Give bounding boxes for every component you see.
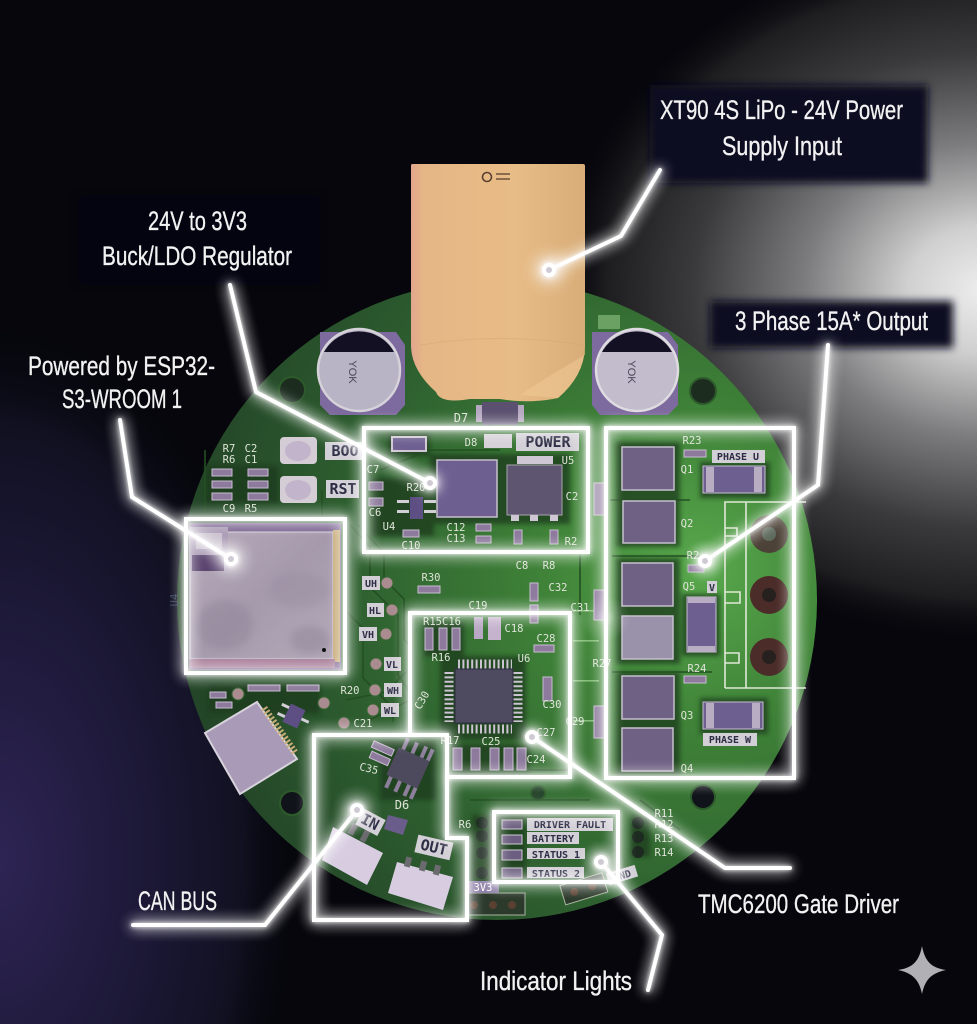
TMC6200 gate driver chip [412, 616, 584, 770]
TMC6200 gate driver chip: R15C16 [423, 616, 461, 628]
CAN bus parts [322, 736, 454, 910]
phase MOSFETs and shunts: Q5 [683, 581, 695, 593]
TMC6200 gate driver chip: R17 [441, 735, 459, 747]
TMC6200 gate driver chip: C28 [537, 633, 555, 645]
diode D7: D7 [454, 411, 468, 425]
mid-board test pads and parts: C31 [571, 602, 589, 614]
tactile buttons: RST [329, 480, 357, 498]
left bulk capacitor: YOK [346, 360, 358, 384]
phase MOSFETs and shunts: Q1 [681, 464, 693, 476]
mid-board test pads and parts: HL [369, 606, 381, 617]
small passives left: R6 [223, 454, 235, 466]
tactile buttons: BOO [331, 442, 359, 460]
mid-board test pads and parts [210, 483, 606, 738]
phase MOSFETs and shunts: Q2 [681, 518, 693, 530]
mid-board test pads and parts: R30 [422, 572, 440, 584]
right bulk capacitor [592, 329, 678, 415]
label: CAN bus: CAN BUS [138, 886, 217, 916]
ground pour via field [573, 315, 620, 722]
CAN bus parts: OUT [419, 836, 449, 859]
header pins: 3V3 [474, 882, 492, 894]
small passives left: R7 [223, 443, 235, 455]
box: power regulator [364, 428, 588, 552]
phase MOSFETs and shunts: V [709, 583, 715, 594]
phase MOSFETs and shunts: Q3 [681, 710, 693, 722]
status LEDs and labels: DRIVER FAULT [534, 820, 606, 831]
label: buck regulator: Buck/LDO Regulator [102, 241, 292, 271]
label: gate driver: TMC6200 Gate Driver [698, 889, 899, 919]
mid-board test pads and parts: C21 [354, 718, 372, 730]
power regulator components: U5 [562, 455, 574, 467]
small passives left: C9 [223, 503, 235, 515]
mid-board test pads and parts: WH [387, 686, 399, 697]
power regulator components [367, 433, 579, 552]
label: XT90 power input: Supply Input [722, 131, 842, 161]
label: XT90 power input: XT90 4S LiPo - 24V Power [660, 95, 903, 125]
circular PCB board [169, 280, 817, 920]
small passives left: C2 [245, 443, 257, 455]
phase MOSFETs and shunts: Q4 [681, 763, 693, 775]
phase MOSFETs and shunts: R2 [687, 550, 699, 562]
label: buck regulator: 24V to 3V3 [148, 206, 247, 236]
leader: buck regulator [230, 285, 430, 483]
label: ESP32 module [28, 351, 215, 414]
box: indicator lights [494, 812, 618, 882]
status LEDs and labels: R11 [655, 808, 673, 820]
mid-board test pads and parts: C8 [516, 560, 528, 572]
highlight glow inside panels [205, 242, 727, 884]
TMC6200 gate driver chip: C29 [566, 716, 584, 728]
copper traces [205, 422, 712, 880]
power regulator components: C12 [447, 522, 465, 534]
TMC6200 gate driver chip: C27 [537, 727, 555, 739]
silkscreen U4: U4 [169, 594, 181, 606]
tactile buttons [280, 437, 363, 503]
status LEDs and labels [459, 808, 673, 880]
power regulator components: R2 [565, 536, 577, 548]
power regulator components: C7 [367, 464, 379, 476]
label: buck regulator [102, 206, 292, 271]
TMC6200 gate driver chip: C30 [412, 689, 432, 712]
CAN bus parts: D6 [395, 798, 409, 812]
label: ESP32 module: Powered by ESP32- [28, 351, 215, 381]
icon: sparkle watermark [898, 946, 946, 994]
leader: CAN bus [133, 810, 357, 925]
TMC6200 gate driver chip: U6 [518, 653, 530, 665]
leader: gate driver [532, 737, 790, 868]
ESP32-S3 module [189, 523, 341, 670]
power regulator components: C13 [447, 533, 465, 545]
small passives left: C1 [245, 454, 257, 466]
mid-board test pads and parts: UH [365, 579, 377, 590]
CAN bus parts: C35 [358, 761, 379, 777]
small passives left: R5 [245, 503, 257, 515]
phase MOSFETs and shunts: PHASE U [717, 452, 759, 463]
mid-board test pads and parts: VH [362, 630, 374, 641]
power regulator components: R20 [407, 482, 425, 494]
status LEDs and labels: R6 [459, 819, 471, 831]
status LEDs and labels: R13 [655, 833, 673, 845]
power regulator components: D8 [465, 437, 477, 449]
component shadows [205, 432, 770, 881]
leader: three phase output [705, 345, 828, 561]
leader: XT90 input [549, 170, 660, 270]
status LEDs and labels: R14 [655, 847, 673, 859]
TMC6200 gate driver chip: C25 [482, 736, 500, 748]
box: three phase output [606, 428, 794, 778]
power regulator components: U4 [383, 521, 395, 533]
TMC6200 gate driver chip: C24 [527, 754, 545, 766]
connector logo [482, 172, 510, 182]
phase MOSFETs and shunts: PHASE W [709, 735, 752, 746]
power regulator components: C10 [402, 540, 420, 552]
phase MOSFETs and shunts: R27 [593, 658, 611, 670]
phase MOSFETs and shunts [593, 435, 765, 775]
leader lines [120, 170, 828, 990]
box: ESP32 module [186, 519, 345, 673]
status LEDs and labels: BATTERY [532, 834, 574, 845]
mid-board test pads and parts: C32 [549, 582, 567, 594]
label: ESP32 module: S3-WROOM 1 [62, 384, 182, 414]
phase MOSFETs and shunts: R23 [683, 435, 701, 447]
mid-board test pads and parts: R8 [543, 560, 555, 572]
mid-board test pads and parts: VL [386, 660, 398, 671]
mid-board test pads and parts: C19 [469, 600, 487, 612]
leader: indicator lights [601, 862, 662, 990]
CAN bus parts: IN [358, 810, 382, 834]
power regulator components: C6 [369, 507, 381, 519]
XT90 power connector [411, 164, 585, 401]
TMC6200 gate driver chip: C30 [543, 699, 561, 711]
right bulk capacitor: YOK [625, 360, 637, 384]
label: indicator lights: Indicator Lights [480, 966, 632, 996]
leader end dots [226, 265, 710, 867]
power regulator components: POWER [525, 433, 572, 451]
mounting holes [279, 377, 716, 815]
header pins: GND [612, 869, 633, 884]
TMC6200 gate driver chip: C18 [505, 623, 523, 635]
leader: ESP32 [120, 420, 231, 559]
highlight outline boxes [186, 428, 794, 920]
phase MOSFETs and shunts: R24 [688, 663, 706, 675]
mid-board test pads and parts: WL [384, 706, 396, 717]
mid-board test pads and parts: R20 [341, 685, 359, 697]
left bulk capacitor [318, 329, 405, 415]
label backing panels [78, 85, 953, 348]
3-phase screw terminal [725, 502, 806, 688]
header pins [467, 865, 638, 915]
box: gate driver and CAN bus [314, 613, 570, 920]
status LEDs and labels: STATUS 2 [532, 869, 580, 880]
small passives left [212, 443, 268, 515]
diode D7 [454, 402, 524, 425]
status LEDs and labels: STATUS 1 [532, 850, 580, 861]
power regulator components: C2 [566, 491, 578, 503]
USB-C connector [205, 702, 297, 794]
TMC6200 gate driver chip: R16 [432, 652, 450, 664]
label: XT90 power input [660, 95, 903, 161]
status LEDs and labels: R12 [655, 819, 673, 831]
